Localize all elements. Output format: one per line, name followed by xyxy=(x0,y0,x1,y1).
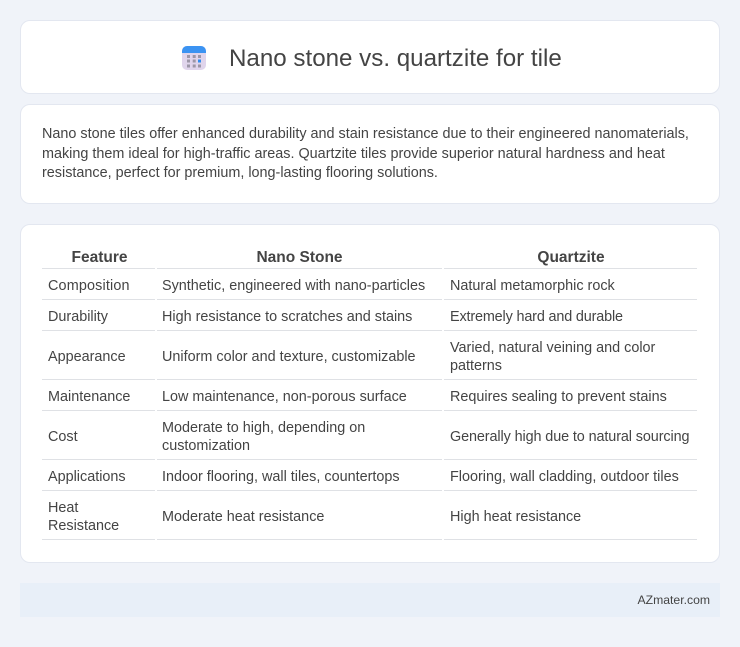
icon: calendar grid xyxy=(182,46,206,70)
row: heat resistance: Moderate heat resistance xyxy=(162,509,324,525)
row: heat resistance: Resistance xyxy=(48,518,119,534)
table header: Quartzite xyxy=(537,249,605,266)
row: appearance: Uniform color and texture, customizable xyxy=(162,349,416,365)
row: cost: Cost xyxy=(48,429,78,445)
row: applications xyxy=(48,469,679,485)
row: cost xyxy=(48,420,689,454)
row: appearance: Varied, natural veining and color xyxy=(450,340,655,356)
row: appearance: patterns xyxy=(450,358,502,374)
row: applications: Indoor flooring, wall tiles, countertops xyxy=(162,469,400,485)
comparison table panel xyxy=(20,224,720,563)
intro text: resistance, perfect for premium, long-lasting flooring solutions. xyxy=(42,165,438,181)
row: heat resistance: High heat resistance xyxy=(450,509,581,525)
table header xyxy=(72,249,605,266)
row: heat resistance: Heat xyxy=(48,500,78,516)
row: durability: Durability xyxy=(48,309,108,325)
title card xyxy=(20,20,720,94)
row: cost: customization xyxy=(162,438,250,454)
row: heat resistance xyxy=(48,500,581,534)
row: durability xyxy=(48,309,623,325)
row: appearance xyxy=(48,340,656,374)
footer text: AZmater.com xyxy=(638,593,710,607)
table header: Feature xyxy=(72,249,128,266)
intro text: Nano stone tiles offer enhanced durability and stain resistance due to their engineered nanomaterials, xyxy=(42,126,689,142)
row: cost: Generally high due to natural sourcing xyxy=(450,429,689,445)
footer bar xyxy=(20,583,720,617)
row: maintenance: Requires sealing to prevent stains xyxy=(450,389,667,405)
row: cost: Moderate to high, depending on xyxy=(162,420,365,436)
comparison table xyxy=(42,249,697,540)
row: composition: Synthetic, engineered with nano-particles xyxy=(162,278,425,294)
row: durability: High resistance to scratches and stains xyxy=(162,309,412,325)
row: applications: Flooring, wall cladding, outdoor tiles xyxy=(450,469,679,485)
intro text panel xyxy=(20,104,720,204)
row: composition: Natural metamorphic rock xyxy=(450,278,615,294)
title: Nano stone vs. quartzite for tile xyxy=(229,45,562,72)
row: composition xyxy=(48,278,615,294)
row: maintenance: Maintenance xyxy=(48,389,130,405)
row: maintenance: Low maintenance, non-porous surface xyxy=(162,389,407,405)
intro text: making them ideal for high-traffic areas. Quartzite tiles provide superior natural hardness and heat xyxy=(42,146,665,162)
row: appearance: Appearance xyxy=(48,349,126,365)
table header: Nano Stone xyxy=(256,249,343,266)
row: applications: Applications xyxy=(48,469,126,485)
row: composition: Composition xyxy=(48,278,130,294)
intro text xyxy=(42,126,689,181)
row: maintenance xyxy=(48,389,667,405)
row: durability: Extremely hard and durable xyxy=(450,309,623,325)
